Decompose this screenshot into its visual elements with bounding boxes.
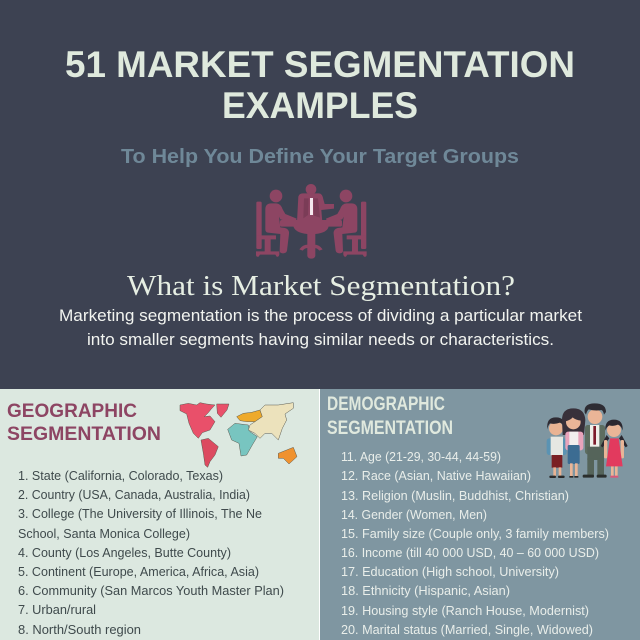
list: demographic items: 16. Income (till 40 000 USD, 40 – 60 000 USD): [341, 545, 599, 560]
heading: demographic segmentation: [327, 393, 453, 439]
intro paragraph: into smaller segments having similar needs or characteristics.: [87, 330, 554, 349]
father: [583, 403, 607, 478]
right person: [326, 190, 367, 257]
icon: world map: [180, 403, 297, 467]
list: geographic items: 8. North/South region: [18, 622, 141, 637]
panel: geographic background: [0, 389, 319, 640]
title: 51 MARKET SEGMENTATION: [65, 44, 575, 85]
north america: [180, 403, 215, 438]
subtitle: To Help You Define Your Target Groups: [121, 146, 519, 168]
list: demographic items: 19. Housing style (Ranch House, Modernist): [341, 603, 589, 618]
heading: demographic segmentation: DEMOGRAPHIC: [327, 393, 445, 415]
africa: [228, 423, 257, 456]
mother: [562, 408, 585, 478]
australia: [278, 447, 297, 464]
list: demographic items: 17. Education (High school, University): [341, 564, 559, 579]
panel: demographic background: [320, 389, 640, 640]
panel: header background: [0, 0, 640, 389]
icon: family: [547, 403, 628, 478]
asia: [248, 403, 293, 440]
heading: demographic segmentation: SEGMENTATION: [327, 417, 453, 439]
list: geographic items: School, Santa Monica College): [18, 526, 190, 541]
list: demographic items: 12. Race (Asian, Native Hawaiian): [341, 468, 531, 483]
title: EXAMPLES: [222, 85, 418, 126]
list: geographic items: 2. Country (USA, Canada, Australia, India): [18, 487, 250, 502]
heading: what is market segmentation: What is Market Segmentation?: [127, 270, 515, 302]
list: geographic items: 4. County (Los Angeles, Butte County): [18, 545, 231, 560]
list: demographic items: 18. Ethnicity (Hispanic, Asian): [341, 583, 510, 598]
centre person: [297, 184, 334, 222]
heading: geographic segmentation: GEOGRAPHIC: [7, 400, 137, 422]
heading: geographic segmentation: [7, 400, 161, 445]
list: geographic items: 1. State (California, Colorado, Texas): [18, 468, 223, 483]
list: geographic items: [18, 468, 284, 637]
list: demographic items: 14. Gender (Women, Men): [341, 507, 487, 522]
south america: [201, 438, 218, 467]
girl: [601, 420, 628, 478]
icon: meeting around table: [256, 184, 367, 259]
list: demographic items: 15. Family size (Couple only, 3 family members): [341, 526, 609, 541]
icon: tie: [310, 198, 313, 215]
boy: [547, 417, 567, 478]
europe: [237, 410, 262, 422]
intro paragraph: Marketing segmentation is the process of dividing a particular market: [59, 306, 582, 325]
table: [280, 220, 342, 259]
intro paragraph: [59, 306, 582, 349]
greenland: [217, 404, 229, 417]
heading: geographic segmentation: SEGMENTATION: [7, 423, 161, 445]
list: geographic items: 3. College (The University of Illinois, The Ne: [18, 506, 262, 521]
list: demographic items: 13. Religion (Muslin, Buddhist, Christian): [341, 488, 569, 503]
list: geographic items: 6. Community (San Marcos Youth Master Plan): [18, 583, 284, 598]
list: demographic items: 11. Age (21-29, 30-44, 44-59): [341, 449, 501, 464]
left person: [256, 190, 297, 257]
title: [65, 44, 575, 126]
list: geographic items: 5. Continent (Europe, America, Africa, Asia): [18, 564, 259, 579]
list: geographic items: 7. Urban/rural: [18, 602, 96, 617]
list: demographic items: [341, 449, 609, 637]
list: demographic items: 20. Marital status (Married, Single, Widowed): [341, 622, 593, 637]
